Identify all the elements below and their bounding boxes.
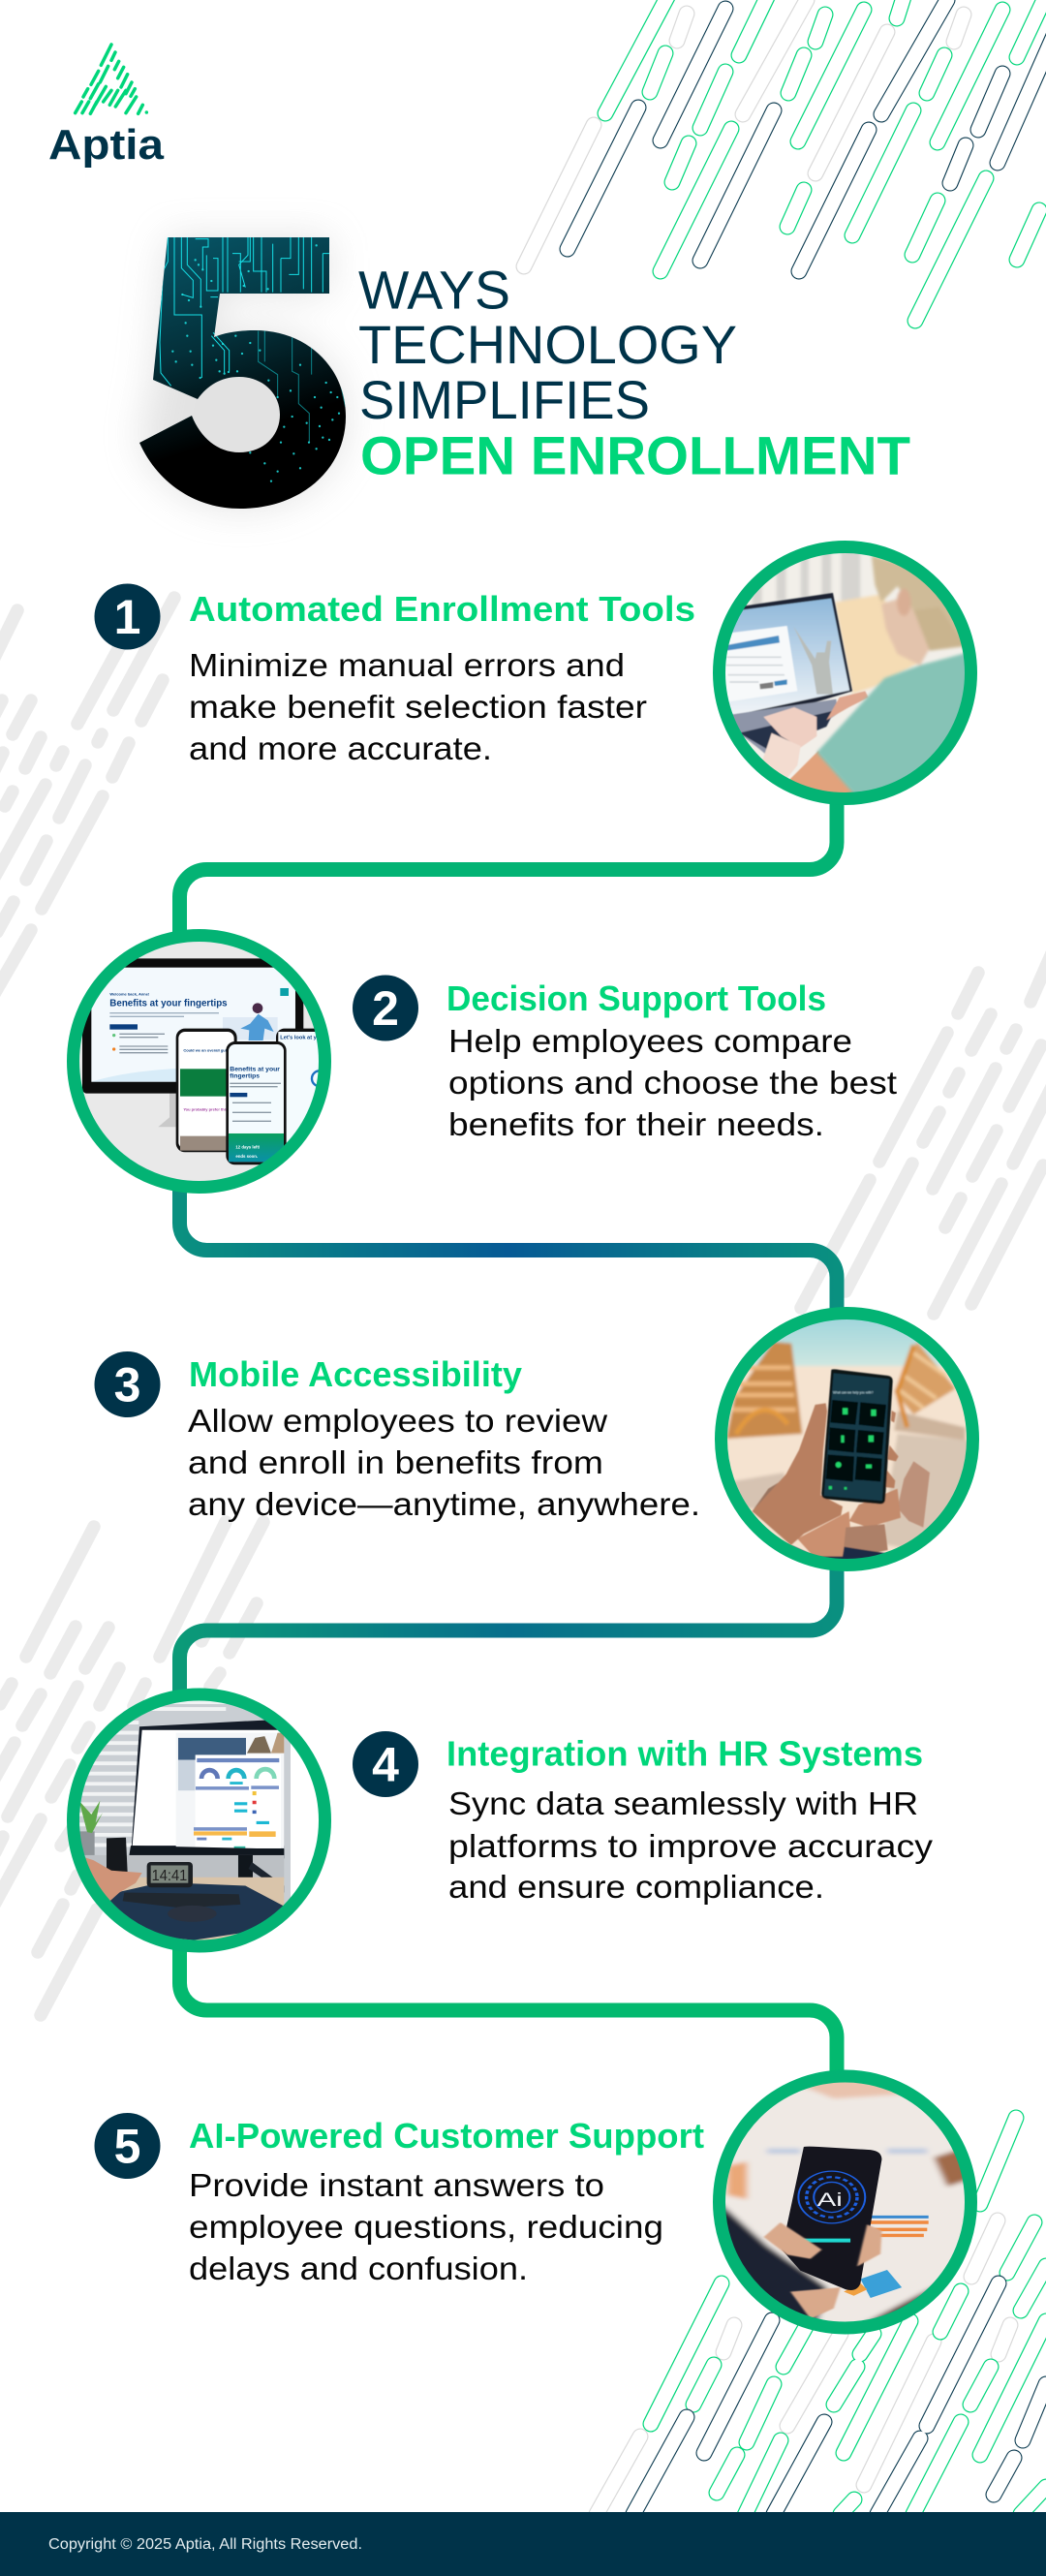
- body 4: and ensure compliance.: [448, 1870, 824, 1906]
- number badge 4: [353, 1731, 418, 1797]
- wordmark: Aptia: [48, 121, 165, 169]
- ring 4: [74, 1694, 325, 1946]
- circuit texture: [160, 237, 346, 481]
- number badge 2: 2: [372, 981, 399, 1036]
- title: WAYS: [358, 260, 510, 320]
- photo: woman at laptop: [713, 541, 977, 805]
- photo: HR dashboard on monitor: 14:41: [152, 1868, 187, 1884]
- number badge 1: [95, 583, 161, 649]
- heading 2: Decision Support Tools: [446, 978, 826, 1018]
- body 3: any device—anytime, anywhere.: [188, 1487, 700, 1523]
- body 5: Provide instant answers to: [189, 2168, 604, 2204]
- body 4: platforms to improve accuracy: [448, 1829, 933, 1865]
- step 4: [353, 1731, 933, 1906]
- title: [358, 260, 910, 486]
- title: OPEN ENROLLMENT: [360, 424, 910, 486]
- body 5: delays and confusion.: [189, 2251, 528, 2287]
- logo: [48, 45, 165, 169]
- number badge 4: 4: [372, 1738, 399, 1792]
- ring 5: [719, 2076, 970, 2328]
- number badge 1: 1: [114, 590, 140, 644]
- heading 1: Automated Enrollment Tools: [189, 589, 695, 629]
- body 1: Minimize manual errors and: [189, 648, 625, 684]
- pattern: top right outlined stripes: [524, 0, 1046, 321]
- heading 5: AI-Powered Customer Support: [189, 2116, 704, 2156]
- heading 4: Integration with HR Systems: [446, 1734, 923, 1773]
- ring 1: [719, 546, 970, 798]
- photo: benefits platform on devices: 12 days left!: [235, 1144, 261, 1149]
- body 3: [188, 1404, 700, 1523]
- photo: benefits platform on devices: Benefits at your fingertips: [109, 999, 228, 1009]
- body 2: [448, 1024, 898, 1143]
- photo: AI assistant on phone: Ai: [817, 2189, 843, 2211]
- title: SIMPLIFIES: [359, 369, 650, 430]
- pattern: grey stripes upper left: [0, 598, 174, 1001]
- photo: benefits platform on devices: Welcome back, Anne!: [109, 992, 149, 997]
- body 3: Allow employees to review: [188, 1404, 608, 1440]
- body 4: [448, 1786, 933, 1906]
- body 2: benefits for their needs.: [448, 1107, 824, 1143]
- footer: [0, 2512, 1046, 2576]
- body 1: make benefit selection faster: [189, 690, 647, 726]
- pattern: bottom right outlined stripes: [597, 2118, 1046, 2533]
- title: TECHNOLOGY: [358, 314, 737, 375]
- body 1: and more accurate.: [189, 731, 492, 767]
- photo: benefits platform on devices: ends soon.: [235, 1154, 258, 1159]
- photo: benefits platform on devices: Benefits at your: [230, 1066, 281, 1072]
- number badge 3: [95, 1351, 161, 1417]
- body 2: Help employees compare: [448, 1024, 852, 1060]
- body 5: employee questions, reducing: [189, 2210, 663, 2246]
- connector: step 4 to step 5: [180, 1947, 837, 2075]
- photo: benefits platform on devices: [67, 929, 331, 1194]
- pattern: grey stripes right: [801, 945, 1046, 1314]
- body 5: [189, 2168, 663, 2287]
- photo: phone on the beach: [715, 1307, 979, 1571]
- photo: benefits platform on devices: Let's look at your: [280, 1035, 326, 1040]
- numeral shape: [139, 237, 346, 509]
- step 2: [353, 975, 898, 1143]
- copyright: Copyright © 2025 Aptia, All Rights Reserved.: [48, 2536, 362, 2553]
- photo: benefits platform on devices: You probably prefer this: [183, 1107, 229, 1112]
- number badge 5: [95, 2113, 161, 2179]
- number badge 5: 5: [114, 2120, 140, 2174]
- body 3: and enroll in benefits from: [188, 1445, 603, 1481]
- pattern: grey stripes lower left: [0, 1522, 263, 2015]
- glow behind 5: [139, 237, 346, 509]
- photo: AI assistant on phone: [707, 2073, 987, 2334]
- photo: phone on the beach: What can we help you with?: [833, 1391, 874, 1395]
- body 1: [189, 648, 647, 767]
- connector: step 2 to step 3: [180, 1188, 837, 1313]
- step 5: [95, 2113, 704, 2287]
- photo: benefits platform on devices: fingertips: [230, 1073, 260, 1080]
- photo: HR dashboard on monitor: [65, 1682, 324, 1954]
- number badge 3: 3: [114, 1358, 140, 1412]
- icon: Aptia triangle mark: [76, 45, 146, 113]
- step 1: [95, 583, 695, 767]
- number badge 2: [353, 975, 418, 1040]
- body 2: options and choose the best: [448, 1066, 898, 1102]
- heading 3: Mobile Accessibility: [189, 1354, 522, 1394]
- ring 2: [74, 936, 325, 1188]
- photo: benefits platform on devices: Could we an overall guide: [183, 1047, 231, 1052]
- body 4: Sync data seamlessly with HR: [448, 1786, 918, 1822]
- step 3: [95, 1351, 700, 1523]
- big number 5: [139, 237, 346, 509]
- connector: step 3 to step 4: [180, 1567, 837, 1695]
- ring 3: [721, 1314, 972, 1566]
- connector: step 1 to step 2: [180, 799, 837, 935]
